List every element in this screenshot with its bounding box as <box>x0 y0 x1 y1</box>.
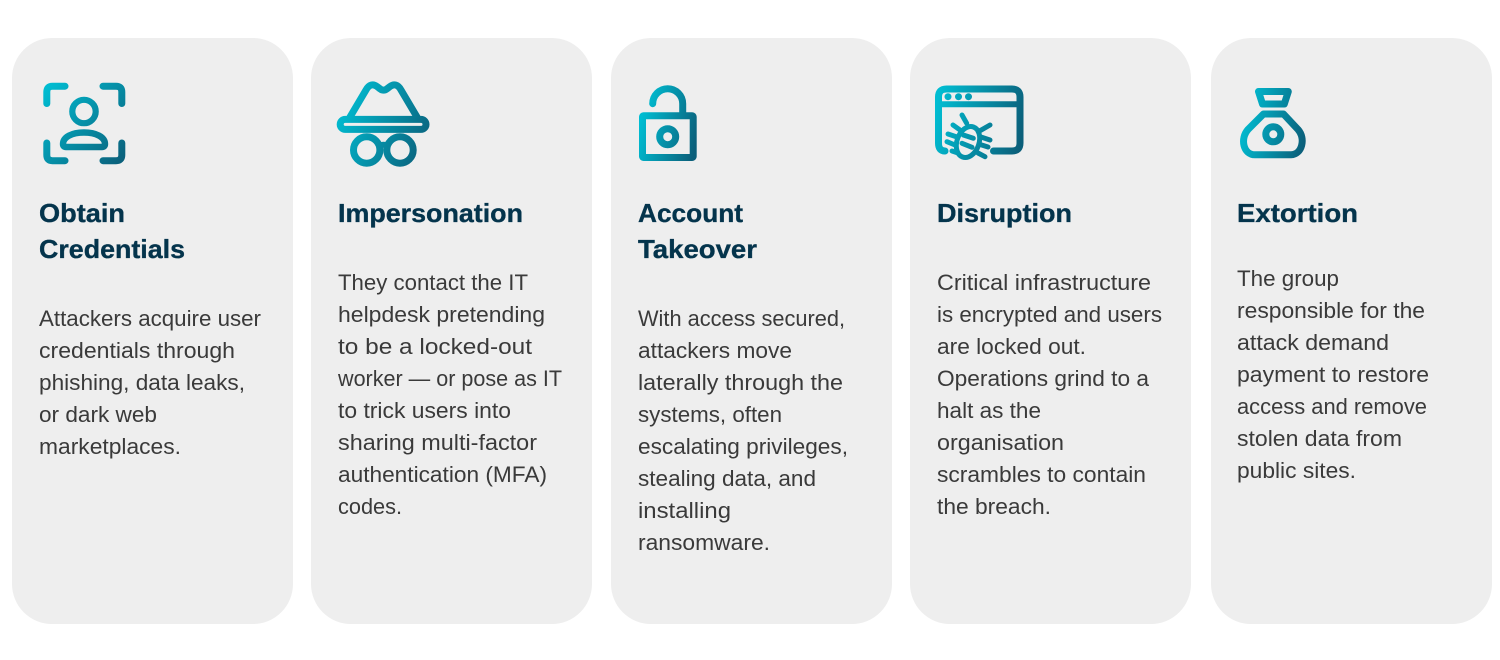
heading: Credentials <box>39 234 185 264</box>
heading: Account <box>638 198 743 228</box>
body text <box>337 270 562 519</box>
body text: attack demand <box>1237 330 1389 355</box>
body text: is encrypted and users <box>937 302 1162 327</box>
body text: escalating privileges, <box>638 434 848 459</box>
body text <box>638 306 848 555</box>
body text: payment to restore <box>1237 362 1429 387</box>
heading: Obtain <box>39 198 125 228</box>
body text <box>937 270 1162 519</box>
panel: impersonation <box>311 38 592 624</box>
icon: hat and glasses <box>340 85 426 163</box>
body text: marketplaces. <box>39 434 181 459</box>
body text: codes. <box>338 494 402 519</box>
body text: or dark web <box>39 402 157 427</box>
panel background <box>611 38 892 624</box>
body text: They contact the IT <box>338 270 528 295</box>
body text: Attackers acquire user <box>39 306 261 331</box>
body text: systems, often <box>638 402 782 427</box>
body text: ransomware. <box>638 530 770 555</box>
heading: Disruption <box>937 198 1072 228</box>
body text: the breach. <box>937 494 1051 519</box>
body text: halt as the <box>937 398 1041 423</box>
heading: Extortion <box>1237 198 1358 228</box>
body text: authentication (MFA) <box>338 462 547 487</box>
body text <box>1237 266 1429 483</box>
heading <box>638 198 757 264</box>
body text: access and remove <box>1237 394 1427 419</box>
icon: open padlock <box>642 89 693 158</box>
body text: public sites. <box>1237 458 1356 483</box>
body text: to trick users into <box>338 398 511 423</box>
body text: responsible for the <box>1237 298 1425 323</box>
body text: phishing, data leaks, <box>39 370 245 395</box>
heading <box>39 198 185 264</box>
panel: disruption <box>910 38 1191 624</box>
body text: Operations grind to a <box>937 366 1149 391</box>
body text: attackers move <box>638 338 792 363</box>
body text: Critical infrastructure <box>937 270 1151 295</box>
body text: worker — or pose as IT <box>337 366 562 391</box>
body text: are locked out. <box>937 334 1086 359</box>
panel background <box>910 38 1191 624</box>
body text: organisation <box>937 430 1064 455</box>
panel: extortion <box>1211 38 1492 624</box>
panel background <box>311 38 592 624</box>
body text: sharing multi-factor <box>338 430 538 455</box>
icon: money bag <box>1244 92 1302 155</box>
icon: face scan <box>47 86 122 161</box>
body text: The group <box>1237 266 1339 291</box>
body text: laterally through the <box>638 370 843 395</box>
body text: installing <box>638 498 731 523</box>
body text: credentials through <box>39 338 235 363</box>
body text: helpdesk pretending <box>338 302 545 327</box>
body text <box>39 306 261 459</box>
heading: Impersonation <box>338 198 523 228</box>
panel background <box>1211 38 1492 624</box>
panel background <box>12 38 293 624</box>
panel: account takeover <box>611 38 892 624</box>
body text: to be a locked-out <box>338 334 533 359</box>
body text: scrambles to contain <box>937 462 1146 487</box>
heading: Takeover <box>638 234 757 264</box>
panel: obtain credentials <box>12 38 293 624</box>
icon: browser window with bug <box>938 89 1020 161</box>
body text: With access secured, <box>638 306 845 331</box>
body text: stealing data, and <box>638 466 816 491</box>
body text: stolen data from <box>1237 426 1402 451</box>
